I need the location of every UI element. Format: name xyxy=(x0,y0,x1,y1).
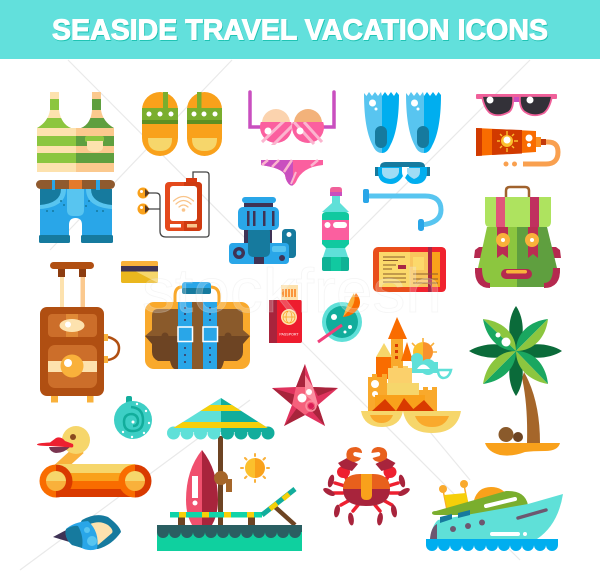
icon: passport with ticket: PASSPORT xyxy=(279,332,299,336)
icon: small sun xyxy=(241,454,269,482)
icon: backpack xyxy=(474,187,561,288)
icon: motor yacht xyxy=(426,480,563,551)
icon: sun lounger xyxy=(170,489,295,526)
icon: striped tank top xyxy=(37,92,114,172)
icon: bottle xyxy=(322,187,349,271)
icon: duck swim ring xyxy=(37,426,152,498)
icon: flip flops xyxy=(142,92,222,156)
icon: denim shorts xyxy=(36,180,115,243)
icon: bikini bottom xyxy=(261,160,323,186)
watermark text: stockfresh xyxy=(142,257,442,326)
icon: mp3 player with earphones xyxy=(138,172,209,237)
icon: diving mask xyxy=(375,162,430,184)
icon: passport with ticket xyxy=(269,285,302,343)
icon: swim fins xyxy=(364,92,441,153)
icon: starfish xyxy=(272,364,338,426)
icon: travel guide book xyxy=(373,247,446,292)
title: SEASIDE TRAVEL VACATION ICONS xyxy=(52,14,548,46)
icon: sun and cloud over castle xyxy=(411,338,451,378)
icon: snorkel xyxy=(363,189,441,231)
icon: surfboard xyxy=(186,450,232,525)
icon: camera xyxy=(229,197,296,264)
icon: crab xyxy=(322,447,411,526)
title banner: SEASIDE TRAVEL VACATION ICONS xyxy=(53,15,549,47)
icon: sunscreen tube xyxy=(476,128,558,166)
icon: conch shell xyxy=(53,515,121,550)
icon: beach umbrella xyxy=(167,398,274,525)
icon: palm tree xyxy=(469,306,562,456)
icon: leather travel bag xyxy=(145,282,250,369)
icon: rolling suitcase xyxy=(40,262,119,402)
icon: sea base with waves xyxy=(157,525,302,551)
icon: cocktail from above xyxy=(318,293,362,342)
icon: sunglasses xyxy=(476,94,557,115)
icon: sand castle xyxy=(361,317,461,433)
icon: spiral shell xyxy=(114,396,152,439)
icon: credit card xyxy=(121,261,158,283)
watermark diagonal lines xyxy=(20,60,530,570)
title banner xyxy=(0,0,600,59)
icon: bikini top xyxy=(250,92,334,146)
